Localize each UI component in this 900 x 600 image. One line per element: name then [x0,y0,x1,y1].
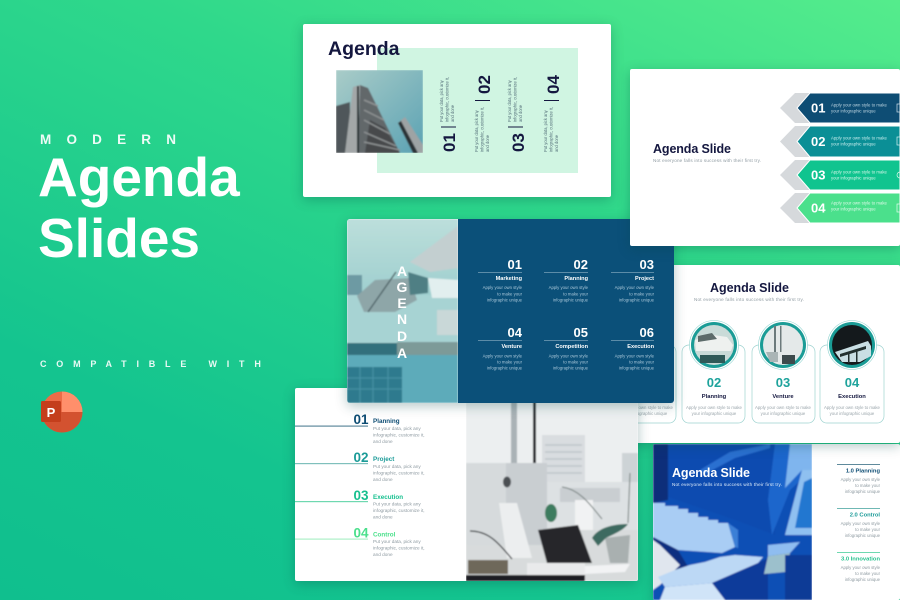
vertical word AGENDA: E [397,295,407,311]
item 01 Planning: Put your data, pick any [373,426,421,431]
panel: slide 1 vertical agenda [303,24,611,197]
item 06 Execution: 06 [640,325,654,340]
chevron row 02: Apply your own style to make [831,136,887,140]
card 04 Execution: Execution [838,394,866,400]
item 02: Put your data, pick any [474,109,479,152]
item 01 Planning [295,412,425,444]
item 1.0 Planning: 1.0 Planning [846,468,880,474]
chevron row 02: your infographic unique [831,142,876,146]
card 02 Planning [682,320,745,423]
item 02 Project: 02 [353,450,368,465]
item 2.0 Control: 2.0 Control [850,512,880,518]
item 06 Execution: Execution [627,344,655,350]
icon: PowerPoint logo: P [47,405,56,420]
item 01 Marketing: Marketing [496,276,523,282]
photo: desk with computer [466,388,638,581]
vertical word AGENDA: A [397,263,407,279]
item 03 [507,77,528,152]
chevron row 04: Apply your own style to make [831,200,887,206]
item 03 Execution: Execution [373,494,403,501]
chevron row 04: your infographic unique [831,206,876,212]
panel: slide 3 navy six items [347,219,674,403]
item 03: and done [518,104,523,122]
chevron row 03: 03 [811,168,825,182]
left heading block [38,132,240,269]
item 02 Planning [544,257,589,302]
item 04 Control: Control [373,532,396,538]
item 01 Marketing: infographic unique [487,298,523,302]
item 02 Planning: Apply your own style [549,285,589,290]
chevron row 01: 01 [811,100,825,116]
card 03 Venture: Venture [772,394,794,400]
slide subtitle: Not everyone falls into success with their first try. [672,482,782,487]
eyebrow: modern: MODERN [40,132,191,147]
item 05 Competition [544,325,589,370]
item 02 Project: infographic, customize it, [373,470,425,476]
card 04 Execution [820,320,884,423]
item 03 Project: 03 [640,257,654,272]
slide title: Agenda Slide [672,466,750,480]
vertical word AGENDA [397,263,408,361]
item 3.0 Innovation: 3.0 Innovation [841,556,880,562]
vertical word AGENDA: A [397,345,407,361]
panel: slide 5 list with office photo [295,388,638,581]
item 02: 02 [475,75,494,94]
item 02 Planning: to make your [563,292,589,296]
item 1.0 Planning [837,464,881,494]
item 05 Competition: infographic unique [553,366,589,370]
item 05 Competition: Competition [555,344,589,350]
vertical word AGENDA: N [397,311,407,327]
card 03 Venture: Apply your own style to make [755,405,812,410]
slide title: Agenda Slide [653,142,731,156]
item 03 Project: Project [635,276,654,282]
item 01 Marketing: Apply your own style [483,285,523,290]
item 02: and done [485,134,490,152]
card 03 Venture [752,320,815,423]
item 02 [474,75,494,152]
card 04 Execution: your infographic unique [830,411,875,416]
item 04 Control: and done [373,552,393,557]
photo: blue stairs [653,444,812,600]
main title: Slides [38,207,200,269]
item 03 Project [611,257,655,302]
chevron row 02: 02 [811,134,825,149]
item 3.0 Innovation [837,552,881,582]
item 06 Execution: Apply your own style [615,354,655,358]
item 05 Competition: Apply your own style [549,354,589,358]
chevron row 04: 04 [811,200,826,216]
vertical word AGENDA: D [397,328,407,344]
item 01 Marketing: 01 [508,257,522,272]
item 01: 01 [440,133,459,152]
item 01: infographic, customize it, [444,77,450,122]
item 1.0 Planning: to make your [855,483,881,488]
item 03: 03 [509,133,528,152]
item 3.0 Innovation: infographic unique [845,577,881,582]
item 02 Project: Put your data, pick any [373,464,421,469]
item 01 Planning: and done [373,439,393,444]
card 04 Execution: Apply your own style to make [824,405,881,410]
chevron row 03: your infographic unique [831,176,876,180]
card 02 Planning: Planning [702,394,727,400]
item 04: Put your data, pick any [543,109,548,152]
photo: hands writing [347,219,458,403]
item 04 [543,75,563,152]
card 01 partially hidden [613,345,676,423]
item 05 Competition: to make your [563,360,589,364]
item 04 Venture: Venture [501,344,522,350]
card 01 partially hidden: your infographic unique [623,411,668,416]
item 2.0 Control: Apply your own style [841,521,881,526]
card 01 partially hidden: Apply your own style to make [617,405,674,410]
main title: Agenda [38,146,240,208]
item 3.0 Innovation: to make your [855,571,881,576]
item 04 Control [295,526,425,557]
item 01 Marketing [478,257,523,302]
item 03 Execution: infographic, customize it, [373,508,425,513]
panel: slide 2 chevron list [630,69,900,246]
item 1.0 Planning: Apply your own style [841,477,881,482]
chevron row 01: Apply your own style to make [831,102,887,108]
main title [38,146,240,269]
chevron row 02 [780,126,900,157]
chevron row 03 [780,160,900,190]
chevron row 01 [780,93,900,123]
item 05 Competition: 05 [574,325,588,340]
slide title: Agenda Slide [710,281,789,295]
slide title: Agenda [328,38,400,60]
item 03 Project: to make your [629,292,655,296]
item 01 [439,77,459,152]
panel: slide 4 circle cards [600,265,900,443]
item 2.0 Control [837,508,881,538]
item 01 Marketing: to make your [497,292,523,296]
item 04 Venture: Apply your own style [483,354,523,358]
item 02 Project: Project [373,456,395,463]
vertical word AGENDA: G [397,279,408,295]
slide subtitle: Not everyone falls into success with their first try. [694,297,804,302]
chevron row 04 [780,193,900,223]
item 02 Project [295,450,425,482]
mint backdrop [377,48,578,173]
item 04: infographic, customize it, [548,107,554,152]
item 02 Project: and done [373,477,393,482]
card 04 Execution: 04 [845,375,860,390]
item 02 Planning: Planning [564,276,589,282]
item 03 Execution: 03 [353,488,369,503]
item 01: and done [450,104,455,122]
item 04 Venture: 04 [508,325,523,340]
item 04 Venture: infographic unique [487,366,523,370]
photo: skyscraper [336,70,423,153]
chevron row 01: your infographic unique [831,108,876,114]
chevron row 03: Apply your own style to make [831,170,887,174]
icon: PowerPoint logo [41,392,82,432]
item 01 Planning: infographic, customize it, [373,432,425,438]
item 1.0 Planning: infographic unique [845,489,881,494]
item 06 Execution: to make your [629,360,655,364]
item 03 Execution [295,488,425,520]
item 03 Execution: Put your data, pick any [373,502,421,506]
card 03 Venture: your infographic unique [761,411,806,416]
item 01 Planning: Planning [373,418,400,425]
item 06 Execution [611,325,655,370]
panel: slide 6 blue stairs [653,444,900,600]
item 2.0 Control: infographic unique [845,533,881,538]
item 03 Project: Apply your own style [615,285,655,290]
item 04 Venture: to make your [497,360,523,364]
item 03: Put your data, pick any [507,79,512,122]
card 03 Venture: 03 [776,375,790,390]
item 02 Planning: infographic unique [553,298,589,302]
card 02 Planning: Apply your own style to make [686,405,743,410]
card 02 Planning: your infographic unique [692,411,737,416]
item 04: and done [554,134,559,152]
item 04 Venture [478,325,523,370]
item 01: Put your data, pick any [439,79,444,122]
item 04: 04 [544,75,563,94]
item 03 Execution: and done [373,514,393,520]
item 04 Control: Put your data, pick any [373,539,421,544]
item 3.0 Innovation: Apply your own style [841,565,881,570]
item 03 Project: infographic unique [619,298,655,302]
item 03: infographic, customize it, [512,77,518,122]
item 01 Planning: 01 [353,412,369,427]
item 02 Planning: 02 [574,257,588,272]
item 04 Control: 04 [353,526,369,540]
item 04 Control: infographic, customize it, [373,546,425,550]
item 2.0 Control: to make your [855,527,881,532]
card 02 Planning: 02 [707,375,721,390]
compatible with label: COMPATIBLE WITH [40,359,271,369]
item 02: infographic, customize it, [480,107,484,152]
slide subtitle: Not everyone falls into success with their first try. [653,158,761,163]
item 06 Execution: infographic unique [619,366,655,370]
